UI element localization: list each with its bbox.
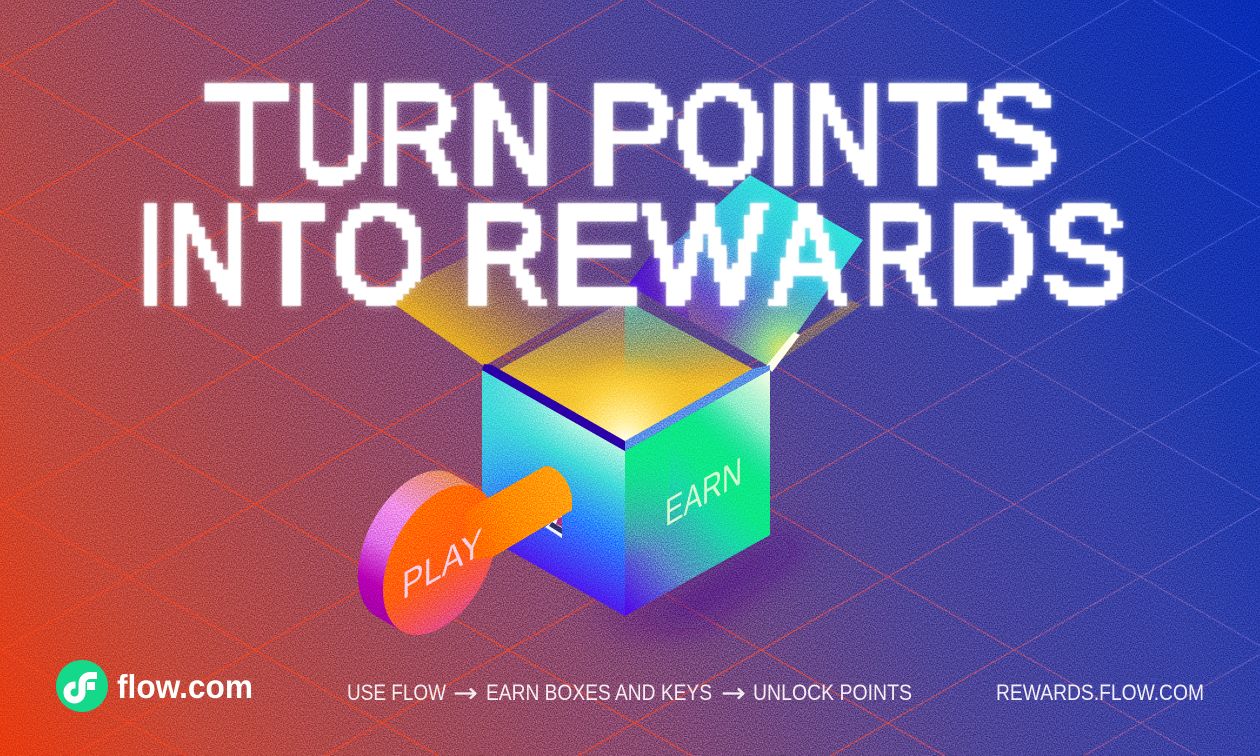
title: S	[973, 57, 1058, 211]
title: T	[206, 57, 288, 211]
box drop shadow	[590, 535, 815, 628]
flow logo	[56, 660, 253, 712]
title: I	[134, 177, 167, 331]
PLAY label on key: PLAY	[402, 520, 483, 609]
title: O	[676, 57, 766, 211]
logo badge circle	[56, 660, 108, 712]
steps line: USE FLOW	[347, 680, 446, 705]
steps line: →	[453, 678, 478, 709]
key: shaft and disc	[358, 466, 572, 654]
box right face	[625, 370, 770, 616]
left lid flap	[385, 225, 625, 366]
url: REWARDS.FLOW.COM	[996, 680, 1204, 705]
title: U	[291, 57, 374, 211]
steps line: UNLOCK POINTS	[753, 680, 912, 705]
key shaft	[465, 466, 572, 560]
title: W	[644, 177, 765, 331]
title: T	[890, 57, 966, 211]
EARN label on box: EARN	[665, 449, 742, 536]
key disc front	[360, 466, 520, 654]
box left face	[482, 370, 625, 616]
title: A	[772, 177, 845, 331]
title: T	[257, 177, 327, 331]
title: S	[1042, 177, 1128, 331]
steps line: EARN BOXES AND KEYS	[486, 680, 712, 705]
back lid flap	[628, 175, 863, 372]
title: N	[166, 177, 250, 331]
title: D	[947, 177, 1036, 331]
illustration: open box with key	[358, 175, 863, 654]
title: I	[762, 57, 807, 211]
keyhole slit	[545, 516, 562, 538]
logo f mark	[67, 676, 97, 700]
title: E	[551, 177, 641, 331]
title: P	[586, 57, 675, 211]
title: R	[861, 177, 938, 331]
box interior glow	[492, 300, 755, 445]
title: N	[802, 57, 886, 211]
title: N	[469, 57, 553, 211]
title: O	[333, 177, 426, 331]
steps line: →	[721, 678, 746, 709]
title: R	[376, 57, 461, 211]
box rim	[482, 364, 770, 451]
right lid flap sliver	[768, 300, 862, 366]
flow.com wordmark: flow.com	[117, 668, 253, 705]
key disc side	[358, 470, 478, 632]
title: R	[462, 177, 548, 331]
